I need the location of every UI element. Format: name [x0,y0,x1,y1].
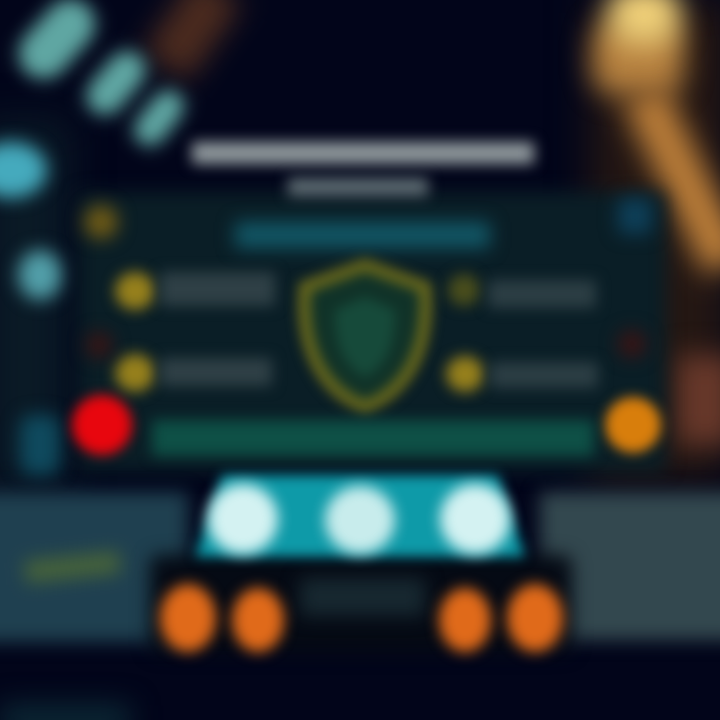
light: white circle center [325,486,395,554]
floor panel: left [0,492,188,642]
light: orange circle 1 [160,584,216,652]
text block: upper left [160,272,275,306]
light: orange lamp glow [592,20,684,95]
decorative pill: teal 2 [78,43,154,123]
background glow: left side [0,120,70,490]
background glow: right side warm [590,0,720,480]
subtitle bar [235,222,490,248]
icon: small red mark left [86,332,112,358]
icon: blue badge top right [618,198,652,234]
decorative blob: brown right [675,355,720,445]
icon: amber badge top left [84,205,118,239]
bottom strip glow [0,705,130,720]
decorative streak: brown top [143,0,242,82]
decorative pill: teal 3 [127,84,191,152]
light: white circle left [208,484,278,554]
decorative blob: cyan left top [0,142,47,198]
light: orange circle 4 [507,584,563,652]
light: yellow lamp [608,0,680,45]
icon: red alert circle [72,395,132,455]
floor panel: right [540,492,720,640]
console: center dim label [300,578,425,616]
console: cyan screen [189,466,532,566]
panel: main dashboard [78,192,666,472]
console: dark base [150,555,572,653]
light: orange circle 3 [439,588,491,652]
light: orange streak [623,85,720,275]
icon: shield [290,252,440,418]
icon: yellow dot upper left [115,272,155,310]
light: orange circle 2 [232,588,284,652]
light: white circle right [440,484,510,554]
floor accent: left yellow-green marks [24,551,121,583]
text block: lower left [160,358,272,386]
title line 2 [288,178,428,196]
icon: yellow dot lower right [446,356,484,392]
title line 1 [192,142,534,164]
decorative blob: teal left lower [20,415,60,475]
icon: orange circle [605,397,661,453]
status bar: green [152,420,594,456]
decorative pill: teal 1 [8,0,106,89]
icon: small red mark right [618,330,646,358]
decorative blob: cyan left middle [18,250,62,300]
icon: yellow dot lower left [115,354,155,392]
text block: lower right [490,362,598,388]
icon: yellow dot upper right [448,274,480,306]
text block: upper right [488,280,596,308]
